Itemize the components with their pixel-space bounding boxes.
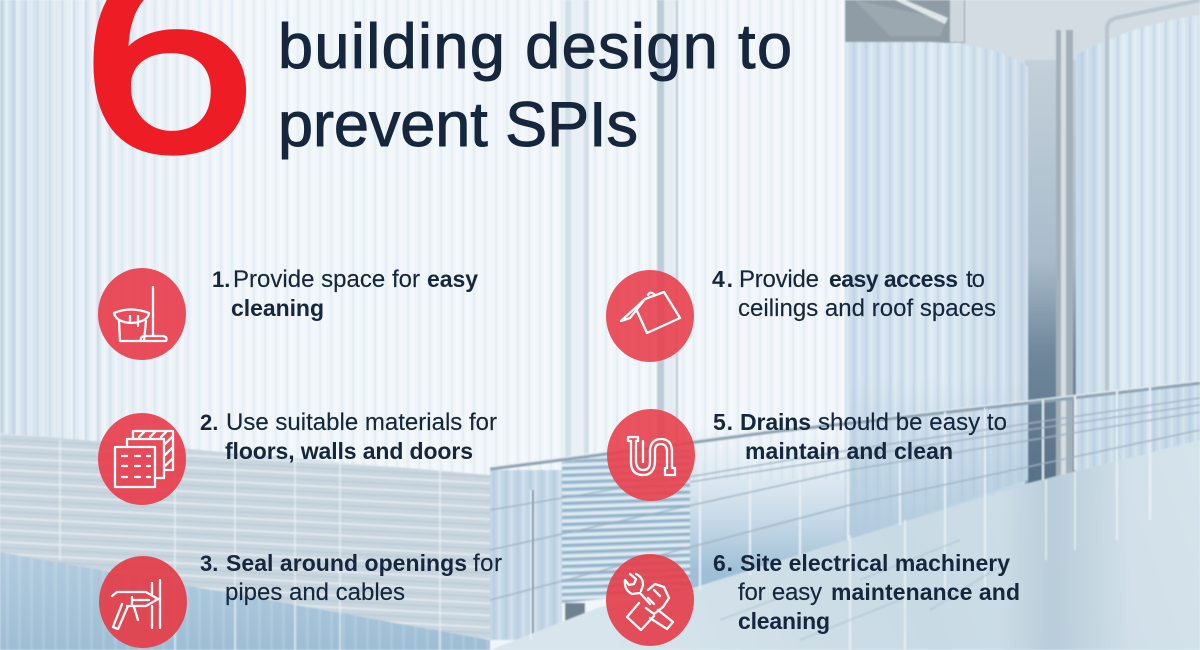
text: item 4: easy access bbox=[829, 266, 958, 292]
icon: sealant gun bbox=[99, 556, 187, 648]
text: item 6: cleaning bbox=[738, 608, 830, 634]
text: item 1: cleaning bbox=[231, 295, 324, 321]
text: item 5: 5. bbox=[713, 409, 733, 435]
text: item 1: Provide space for bbox=[233, 266, 420, 293]
title: prevent SPIs bbox=[278, 90, 638, 160]
silo left bbox=[845, 42, 1028, 540]
glossy floor bbox=[490, 440, 1200, 650]
text: item 6: maintenance and bbox=[831, 579, 1020, 605]
text: item 3: 3. bbox=[200, 551, 218, 576]
text: item 2: 2. bbox=[200, 410, 218, 435]
vertical pipes bbox=[565, 0, 678, 470]
metal railing bbox=[490, 381, 1200, 640]
blue wall corner block bbox=[490, 470, 562, 640]
text: item 5: maintain and clean bbox=[745, 438, 953, 464]
icon: hand with wrench bbox=[606, 554, 694, 646]
item 3: seal openings bbox=[99, 550, 502, 648]
steel drain pipe bbox=[1056, 0, 1200, 485]
text: item 1: 1. bbox=[212, 267, 230, 292]
text: item 5: Drains bbox=[740, 409, 811, 435]
item 6: electrical machinery bbox=[606, 550, 1020, 646]
icon: material samples bbox=[98, 413, 186, 505]
item 2: suitable materials bbox=[98, 409, 497, 505]
grey blinds behind left railing bbox=[0, 433, 490, 650]
ventilation machinery bbox=[845, 0, 965, 43]
text: item 2: floors, walls and doors bbox=[225, 438, 473, 464]
blue wall right of blinds bbox=[690, 380, 1200, 590]
title: building design to bbox=[278, 12, 792, 82]
title bbox=[278, 12, 792, 160]
ceiling bbox=[960, 0, 1200, 120]
text: item 2: Use suitable materials for bbox=[226, 409, 497, 436]
icon: bucket and mop bbox=[98, 268, 186, 360]
text: item 4 bbox=[712, 266, 996, 322]
text: item 3 bbox=[200, 550, 502, 606]
text: item 1: easy bbox=[427, 266, 478, 292]
text: item 4: to bbox=[966, 266, 985, 293]
text: item 4: ceilings and roof spaces bbox=[738, 295, 996, 322]
white blinds centre bbox=[562, 450, 690, 630]
text: item 5 bbox=[713, 409, 1007, 464]
icon: drain trap pipe bbox=[607, 409, 695, 501]
text: item 3: pipes and cables bbox=[225, 579, 405, 606]
text: item 5: should be easy to bbox=[818, 409, 1007, 436]
icon: roof hatch bbox=[606, 270, 694, 362]
text: item 3: for bbox=[473, 550, 502, 577]
text: item 6: 6. bbox=[713, 550, 733, 576]
text: item 6: Site electrical machinery bbox=[740, 550, 1010, 576]
item 5: drains bbox=[607, 409, 1007, 501]
item 1: easy cleaning bbox=[98, 266, 478, 360]
item 4: easy access bbox=[606, 266, 996, 362]
text: item 4: 4. bbox=[712, 266, 733, 292]
text: item 1 bbox=[212, 266, 478, 321]
text: item 3: Seal around openings bbox=[226, 550, 467, 576]
text: item 6 bbox=[713, 550, 1020, 634]
text: item 4: Provide bbox=[739, 266, 819, 293]
service column bbox=[1025, 60, 1080, 490]
text: item 6: for easy bbox=[738, 579, 822, 606]
text: item 2 bbox=[200, 409, 497, 464]
silo right bbox=[1076, 15, 1200, 480]
